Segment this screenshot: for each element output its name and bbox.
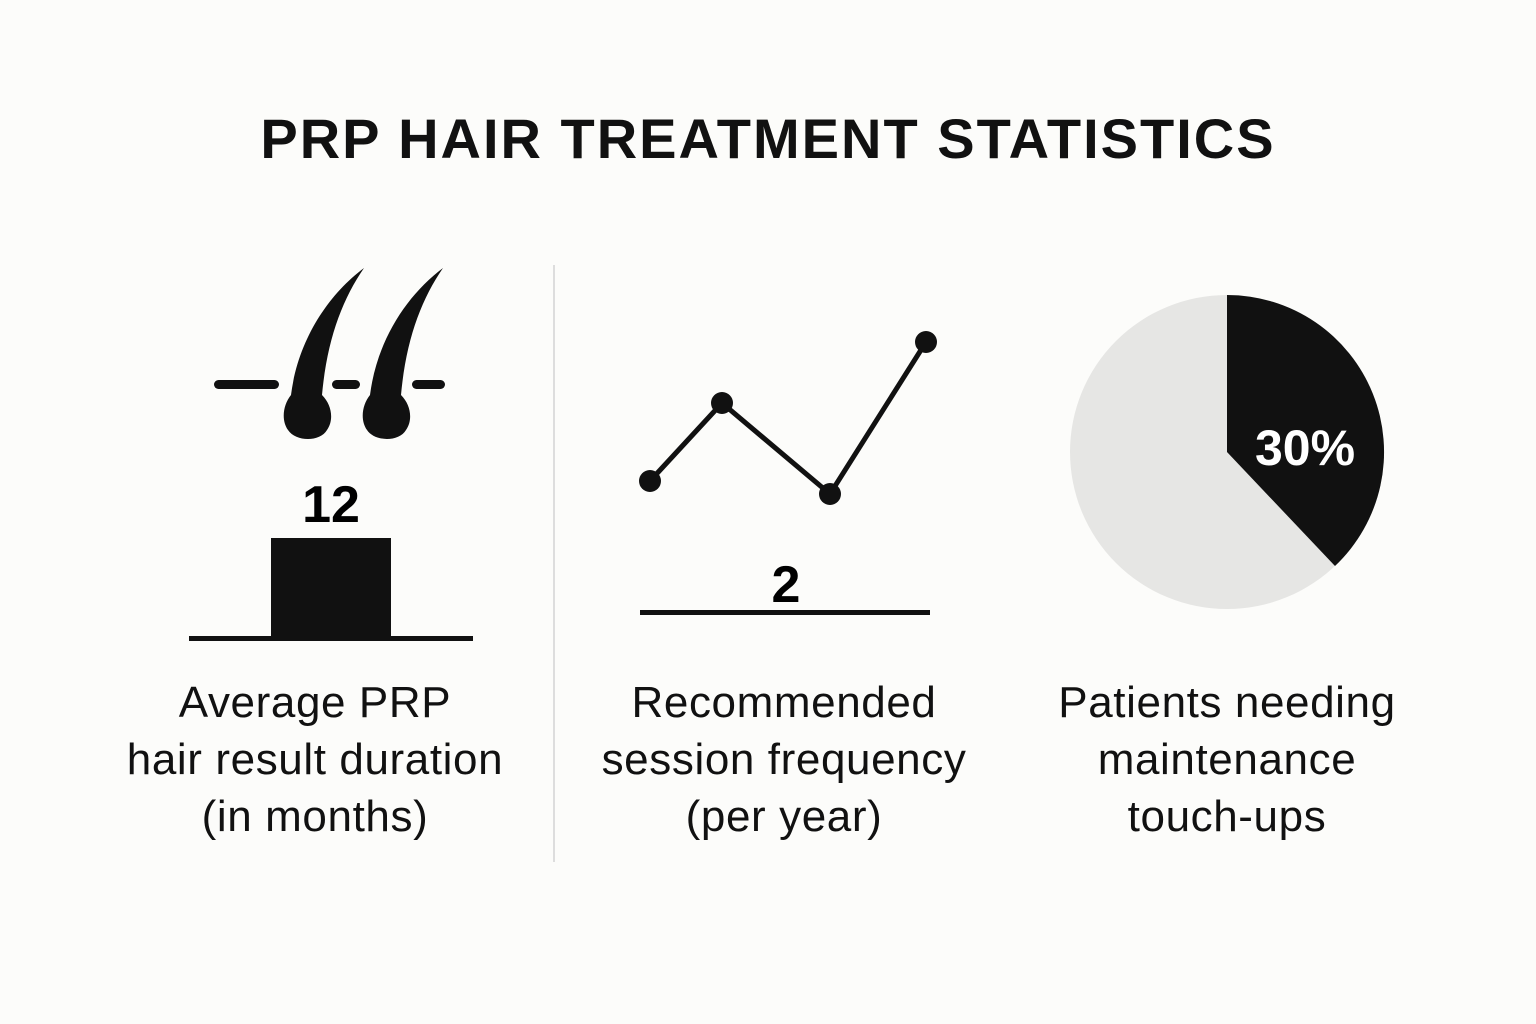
line chart [639, 331, 937, 615]
label: maintenance: Patients needing [1058, 678, 1396, 727]
label: duration: hair result duration [127, 735, 503, 784]
pie chart [1070, 295, 1384, 609]
line chart: 2 [772, 556, 800, 614]
bar chart: 12 [302, 476, 360, 534]
divider [553, 265, 555, 862]
icon: hair follicles [214, 268, 445, 439]
label: maintenance: touch-ups [1128, 792, 1326, 841]
label: duration [127, 678, 503, 841]
label: frequency: session frequency [602, 735, 966, 784]
label: frequency: Recommended [632, 678, 936, 727]
title: PRP HAIR TREATMENT STATISTICS [260, 107, 1276, 170]
pie chart: 30% [1255, 420, 1355, 476]
label: maintenance [1058, 678, 1396, 841]
bar chart [189, 476, 473, 641]
label: maintenance: maintenance [1098, 735, 1356, 784]
label: frequency: (per year) [686, 792, 882, 841]
label: duration: Average PRP [179, 678, 451, 727]
label: frequency [602, 678, 966, 841]
label: duration: (in months) [202, 792, 428, 841]
